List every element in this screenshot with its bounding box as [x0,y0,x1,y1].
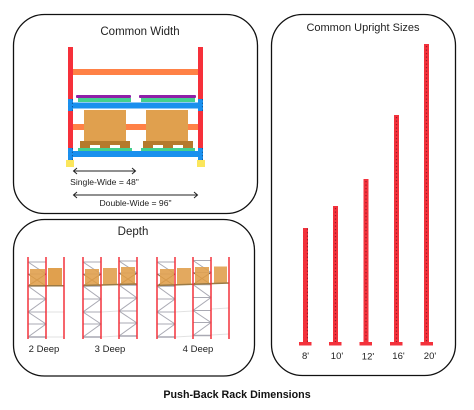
panel: common upright sizes [272,14,456,376]
rack: 3 deep [83,257,137,355]
label: single-wide: Single-Wide = 48" [70,177,139,187]
arrow: double-wide [74,192,198,198]
label: 4 deep: 4 Deep [183,344,213,355]
heading: common width: Common Width [100,26,180,38]
arrow: single-wide [74,168,136,174]
label: 12 ft: 12' [362,352,374,362]
upright: 20 ft [420,44,436,362]
title: Push-Back Rack Dimensions [163,389,311,401]
upright: 16 ft [390,115,405,362]
upright: 12 ft [360,179,374,362]
panel: common width [14,14,258,214]
upright: 8 ft [299,228,312,362]
label: 3 deep: 3 Deep [95,344,125,355]
label: 16 ft: 16' [392,351,405,362]
label: 8 ft: 8' [302,351,309,362]
label: 2 deep: 2 Deep [29,344,59,355]
rack front view [66,47,205,167]
label: double-wide: Double-Wide = 96" [99,198,172,208]
heading: common upright sizes: Common Upright Sizes [306,22,420,34]
label: 10 ft: 10' [331,351,343,362]
rack: 2 deep [28,257,64,355]
upright: 10 ft [329,206,343,362]
label: 20 ft: 20' [424,351,436,362]
heading: depth: Depth [118,226,148,238]
rack: 4 deep [157,257,229,355]
panel: depth [14,220,254,376]
